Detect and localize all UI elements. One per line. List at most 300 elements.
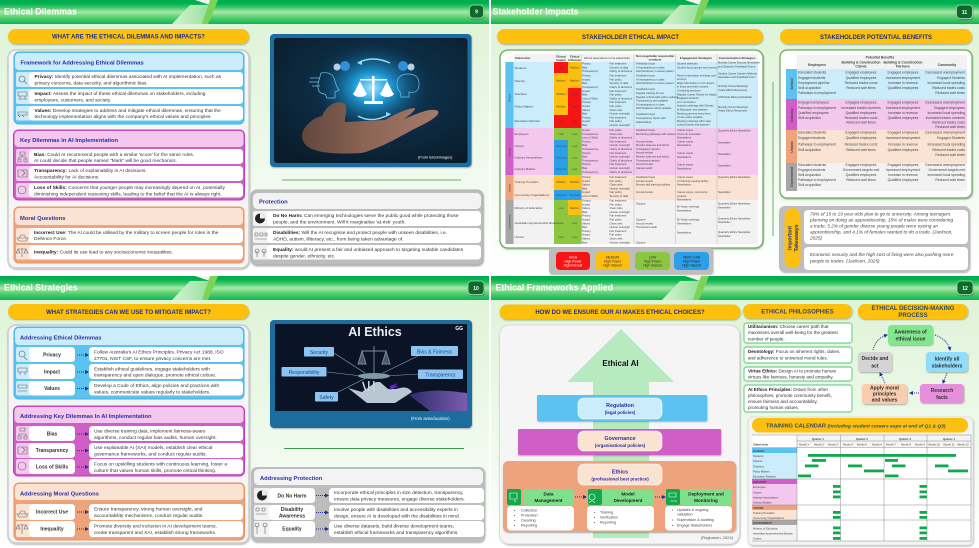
image: hand holding glowing scales — [270, 34, 472, 167]
impact and influence cells: Low — [572, 156, 577, 160]
column: model development: • — [594, 510, 596, 514]
calendar labels: Students — [753, 454, 764, 458]
card: AI ethics principles: ensure fairness and accountability, — [748, 399, 818, 404]
benefits column 2: Qualified employees — [846, 111, 877, 115]
ethical dependence column: Clarity of decisions — [610, 136, 633, 140]
impact and influence cells — [554, 62, 582, 244]
panel: ethical AI pyramid — [500, 325, 740, 544]
non-negotiable column: Monitor skill training facilities — [636, 183, 671, 187]
label: Ethical AI: Ethical AI — [602, 359, 639, 368]
non-negotiable column: Transparent reports — [636, 147, 660, 151]
legend: low — [635, 252, 670, 270]
panel: framework: Framework for Addressing Ethical Dilemmas — [20, 60, 144, 66]
panel: addressing protection: Involve people with disabilities and accessibility experts in — [334, 507, 458, 513]
stakeholder names: Community Organisations — [514, 193, 550, 197]
non-negotiable column: Annual review — [636, 139, 653, 143]
panel: addressing protection: design, ensure AI is developed with the disabilities in mind. — [334, 514, 460, 520]
panel: moral questions: Incorrect Use: The AI could be utilised by the military to screen people for roles in the — [34, 230, 219, 236]
heading pill: ethical philosophies — [743, 304, 852, 318]
ethical dependence column: Bias — [582, 155, 588, 159]
column: deployment and monitoring: Updates & ongoing — [677, 508, 708, 512]
node: apply principles: and values — [872, 398, 898, 404]
card: virtue ethics: Virtue Ethics: Design AI to promote human — [748, 368, 837, 374]
page number badge 9: 9 — [475, 10, 478, 16]
benefits headers: Potential Benefits — [866, 56, 894, 60]
impact and influence cells: High — [558, 66, 564, 70]
ethical dependence column: Fair policy — [610, 93, 622, 97]
panel: addressing ethical dilemmas: Establish ethical guidelines, engage stakeholders with — [94, 366, 210, 372]
benefits column 2: Reduced trades costs — [845, 81, 878, 85]
panel: addressing protection: Awareness — [279, 514, 305, 520]
benefits column 3: Qualified employees — [888, 116, 919, 120]
ethical dependence column: Privacy — [582, 229, 591, 233]
node: research facts: Research — [931, 388, 953, 394]
ethical dependence column: Fair treatment — [610, 139, 626, 143]
calendar labels: Quarter 3 — [899, 437, 911, 441]
slide: Ethical Strategies — [0, 276, 489, 548]
band: governance: Governance — [604, 436, 636, 442]
ethical dependence column: Fair policy — [610, 104, 622, 108]
communication column: Newsletter — [718, 152, 731, 156]
node: identify stakeholders: Identify all — [935, 356, 960, 362]
panel: addressing ethical dilemmas: Privacy — [43, 352, 61, 358]
tag: security: Security — [310, 350, 329, 356]
column: deployment and monitoring: Supervision & auditing — [677, 518, 714, 522]
stakeholder names: Policy Makers — [514, 104, 534, 108]
column: data management: • — [514, 514, 516, 518]
card: utilitarianism: Utilitarianism: Choose career path that — [748, 324, 829, 329]
panel: addressing key dilemmas: Use explainable AI (XAI) models, establish clear ethical — [94, 445, 212, 451]
communication column: Newsletter — [718, 164, 731, 168]
heading pill: WHAT ARE THE ETHICAL DILEMMAS AND IMPACTS? — [52, 34, 205, 40]
panel: addressing protection: Do No Harm — [278, 494, 307, 500]
divider — [282, 180, 461, 181]
ethical dependence column: Clear roles — [610, 236, 623, 240]
non-negotiable column: Feedback loops — [636, 87, 656, 91]
band: ethics: (professional best practice) — [591, 476, 649, 482]
communication column: Monthly Career Discuss Newsletter — [718, 60, 760, 64]
column: model development: Reporting — [600, 520, 616, 524]
calendar row name cells — [752, 448, 797, 540]
image: AI Ethics diagram — [270, 320, 472, 428]
ethical dependence column: Fair treatment — [610, 175, 626, 179]
panel: addressing ethical dilemmas: 27701, NIST CSF, to ensure privacy concerns are met. — [94, 356, 211, 362]
impact and influence cells: Low — [572, 144, 577, 148]
benefits column 3: Qualified employees — [888, 178, 919, 182]
node: decide and act: Decide and — [862, 356, 888, 362]
column: deployment and monitoring: • — [672, 518, 674, 522]
non-negotiable column: Monitor data use and ethics — [636, 143, 670, 147]
node: identify stakeholders: stakeholders — [932, 364, 963, 370]
benefits headers: Partners — [896, 64, 910, 68]
communication column: LMS Data Mining Newsletter — [718, 95, 752, 99]
source citation: (Roghanen, 2024) — [701, 535, 734, 540]
page number badge 12 — [957, 281, 973, 294]
ethical dependence column: Bias — [582, 225, 588, 229]
benefits headers: Building & Construction — [884, 60, 922, 64]
stakeholder names: Australian Apprenticeship Boards — [514, 221, 559, 225]
tag: safety: Safety — [319, 395, 334, 401]
benefits column 4: Government targets met — [928, 168, 965, 172]
engagement column: Meeting partners every term — [677, 111, 711, 115]
legend: high: High Power — [564, 260, 582, 264]
panel: important takeaways: Important — [788, 226, 794, 250]
impact and influence cells: Low — [572, 221, 577, 225]
column: model development: Verification — [600, 516, 618, 520]
node: identify stakeholders — [926, 352, 968, 372]
engagement column: Student webinars — [677, 62, 698, 66]
stakeholder names — [514, 66, 559, 239]
column: data management: Protection — [521, 514, 538, 518]
impact and influence cells: Medium — [556, 104, 566, 108]
non-negotiable column: Annual review — [636, 151, 653, 155]
band: regulation: Regulation — [606, 403, 634, 409]
heading pill: decision-making process: PROCESS — [898, 313, 928, 319]
panel: potential benefits table — [780, 50, 972, 198]
engagement column: Newsletters — [677, 143, 692, 147]
non-negotiable column: Feedback loops — [636, 175, 656, 179]
engagement column: Regular Career Panels for Highly — [677, 92, 717, 96]
card: utilitarianism: number of people. — [748, 336, 785, 342]
slide: Stakeholder Impacts — [491, 0, 979, 274]
column: deployment and monitoring — [665, 489, 732, 530]
calendar labels: Quarter 2 — [856, 437, 868, 441]
impact and influence cells: Medium — [570, 180, 579, 184]
node: apply principles — [862, 384, 907, 404]
non-negotiable column: Annual review — [636, 179, 653, 183]
calendar labels: Month 11 — [943, 442, 955, 446]
non-negotiable column: Transparent reports — [636, 158, 660, 162]
panel: important takeaways: apprenticeship, and 4.1% of females wanted to do a trade. (Jackson, — [810, 230, 953, 234]
impact and influence cells: Low — [559, 235, 564, 239]
benefits column 4: Reduced trades costs — [932, 148, 965, 152]
column: data management: Collection — [521, 508, 537, 512]
impact and influence cells: Very Low — [556, 144, 566, 148]
engagement column: Career expos — [677, 175, 694, 179]
column: model development — [587, 489, 654, 530]
calendar labels: Month 7 — [886, 442, 896, 446]
benefits column 4: Decreased unemployment — [925, 100, 965, 104]
benefits column 2: Engaged employees — [846, 163, 877, 167]
ethical dependence column: Bias — [582, 81, 588, 85]
non-negotiable column: Support — [636, 218, 646, 222]
communication column: Quarterly Ethics Newsletter — [718, 128, 751, 132]
benefits column 1: Skill acquisition — [798, 116, 821, 120]
panel: addressing protection: ensure data privacy measures, engage diverse stakeholders. — [334, 496, 465, 502]
panel: training calendar: TRAINING CALENDAR (including student careers expo at end of Q1 & Q3) — [766, 424, 946, 430]
stakeholder names: Training Providers — [514, 180, 539, 184]
calendar labels: Quarter 1 — [812, 437, 824, 441]
ethical dependence column: Impact — [582, 233, 590, 237]
page number badge 12: 12 — [962, 286, 968, 292]
engagement column: Major information on AI careers — [677, 81, 715, 85]
calendar labels: Month 9 — [915, 442, 925, 446]
column: data management — [507, 489, 574, 530]
panel: addressing ethical dilemmas: Follow Australia's AI Ethics Principles, Privacy Act 1988, ISO — [94, 350, 224, 356]
benefits column 4: Reduced trades costs — [932, 120, 965, 124]
legend: very low: High Power — [683, 260, 701, 264]
panel: addressing ethical dilemmas: Addressing Ethical Dilemmas — [20, 336, 102, 342]
panel: addressing key dilemmas: Loss of Skills — [36, 464, 68, 470]
ethical dependence column: Human oversight — [610, 123, 630, 127]
non-negotiable column: Annual review — [636, 190, 653, 194]
card: utilitarianism — [744, 323, 852, 343]
benefits column 2: Engaged employees — [846, 70, 877, 74]
table column headers: Ethical — [556, 54, 566, 58]
calendar labels — [753, 437, 969, 540]
benefits column 2: Government targets met — [843, 168, 879, 172]
card: deontology — [744, 347, 852, 363]
panel: moral questions: Moral Questions — [20, 216, 65, 222]
column: data management: • — [514, 518, 516, 522]
card: deontology: Deontology: Focus on inherent rights, duties, — [748, 349, 840, 354]
communication column: and Quarterly Feedback Forms — [718, 64, 756, 68]
benefits headers: Building & Construction — [842, 60, 880, 64]
heading pill — [497, 29, 763, 44]
panel: framework: privacy concerns, data security, and algorithmic bias. — [34, 80, 148, 86]
calendar labels: Education Partners — [753, 474, 777, 478]
calendar labels: Ministry of Education — [753, 526, 778, 530]
impact and influence cells: Medium — [556, 92, 566, 96]
non-negotiable column: Annual review — [636, 162, 653, 166]
ethical dependence column: Loss of Skills — [582, 96, 598, 100]
panel: potential benefits table: Industry — [790, 108, 794, 122]
arrows: process cycle — [873, 335, 950, 393]
column: model development: • — [594, 520, 596, 524]
ethical dependence column: Clarity of decisions — [610, 96, 633, 100]
engagement column: Newsletters — [677, 136, 692, 140]
panel: addressing key dilemmas: Addressing Key Dilemmas In AI Implementation — [20, 414, 152, 420]
benefits column 2: Reduced wait times — [846, 178, 876, 182]
engagement column: Newsletters — [677, 221, 692, 225]
engagement column: AI Training meeting facility — [677, 179, 709, 183]
ethical dependence column: Human oversight — [610, 143, 630, 147]
calendar labels: Quarter 4 — [943, 437, 955, 441]
benefits column 1: Skill acquisition — [798, 173, 821, 177]
engagement column: Newsletters — [677, 230, 692, 234]
ethical dependence column: Clarity of decisions — [610, 85, 633, 89]
benefits column 1: Engaged students — [798, 168, 826, 172]
ethical dependence column: Values — [582, 108, 591, 112]
ethical dependence column: Human oversight — [610, 166, 630, 170]
non-negotiable column: Support — [636, 241, 646, 245]
ethical dependence column: Impact — [582, 119, 590, 123]
legend: low: High Power — [644, 260, 662, 264]
engagement column: Career expos — [677, 162, 694, 166]
card: virtue ethics — [744, 367, 852, 381]
engagement column: Industry meetings with Ministry — [677, 104, 714, 108]
benefits column 4: Engaged Students — [937, 76, 965, 80]
slide: Ethical Frameworks Applied — [491, 276, 979, 548]
column: model development: Development — [614, 498, 643, 503]
impact and influence cells: Very Low — [556, 167, 566, 171]
slide header band — [491, 0, 979, 24]
legend: very low: High Interest — [682, 264, 701, 268]
card: deontology: and adherence to universal moral rules. — [748, 356, 828, 360]
calendar labels: Month 5 — [857, 442, 867, 446]
engagement column: Newsletters — [677, 183, 692, 187]
calendar labels: Unions — [753, 490, 762, 494]
ethical dependence column: Fair policy — [610, 218, 622, 222]
card: AI ethics principles: AI Ethics Principles: Draws from other — [748, 387, 829, 392]
node: apply principles: principles — [873, 392, 897, 398]
stakeholder names: Employers — [514, 132, 529, 136]
panel: protection: Do No Harm: Can emerging technologies serve the public good while protecting those — [273, 213, 459, 219]
panel: addressing key dilemmas: Bias — [47, 432, 57, 438]
communication column: Quarterly Ethics Newsletter — [718, 216, 751, 220]
page number badge 10: 10 — [473, 286, 479, 292]
ethical dependence column: Bias — [582, 240, 588, 244]
benefits column 1: Pathways to employment — [798, 91, 836, 95]
engagement column: Newsletters — [677, 198, 692, 202]
ethical dependence column: Transparency — [582, 170, 599, 174]
ethical dependence column: Values — [582, 236, 591, 240]
column: data management: • — [514, 508, 516, 512]
benefits column 1: Skill acquisition — [798, 183, 821, 187]
panel: protection: Protection — [259, 200, 288, 206]
table column headers: conducts — [649, 58, 662, 62]
benefits column 2: Reduced trades costs — [845, 116, 878, 120]
benefits column 4: Decreased unemployment — [925, 163, 965, 167]
table column headers: Communication Strategies — [719, 56, 756, 60]
ethical dependence column: Impact — [582, 77, 590, 81]
stakeholder names: Ministry of Education — [514, 206, 543, 210]
calendar labels: Month 10 — [928, 442, 940, 446]
node: decide and act: act — [871, 364, 879, 370]
legend: high: High Interest — [564, 264, 582, 268]
tag: bias and fairness — [411, 346, 458, 356]
panel: important takeaways: 2025) — [809, 236, 822, 240]
ethical dependence column: Security of data — [610, 194, 629, 198]
ethical dependence column: Bias — [582, 123, 588, 127]
benefits column 4: Reduced trades costs — [932, 86, 965, 90]
panel: protection: people, and the environment. Will it marginalise 'at-risk' youth. — [273, 220, 406, 226]
table column headers: Ethical dependence to the stakeholder — [584, 56, 630, 60]
impact and influence cells: High — [558, 120, 564, 124]
diagram: decision-making cycle — [858, 325, 968, 404]
page number badge 10 — [468, 281, 484, 294]
panel: moral questions: Inequality: Could its use lead to any socioeconomic inequalities. — [34, 250, 173, 256]
communication column: Newsletter — [718, 140, 731, 144]
ethical dependence column: Clear roles — [610, 108, 623, 112]
ethical dependence column: Bias — [582, 186, 588, 190]
calendar labels: Training Providers — [753, 511, 775, 515]
tag: security — [304, 347, 334, 356]
impact and influence cells: Medium — [556, 78, 566, 82]
panel: addressing moral questions: Ensure transparency, strong human oversight, and — [94, 506, 203, 512]
legend: medium — [595, 252, 630, 270]
heading pill: decision-making process — [858, 304, 968, 319]
ethical dependence column: Human oversight — [610, 210, 630, 214]
panel: key dilemmas: Loss of Skills: Concerns that younger people may increasingly depend on AI, potentially — [34, 185, 225, 191]
communication column: Monthly School Meetings — [718, 84, 749, 88]
calendar labels: Industry Bodies — [753, 500, 772, 504]
calendar labels: INDUSTRY — [753, 480, 767, 484]
benefits column 4: Reduced wait times — [935, 153, 965, 157]
node: awareness — [888, 325, 933, 345]
panel: training calendar — [748, 417, 973, 545]
ethical dependence column: Fair treatment — [610, 162, 626, 166]
ethical dependence column — [582, 62, 633, 244]
benefits column 4: Reduced wait times — [935, 91, 965, 95]
ethical dependence column: Clarity of decisions — [610, 158, 633, 162]
calendar labels: Parents — [753, 459, 763, 463]
panel: addressing protection — [251, 467, 485, 542]
non-negotiable column: Feedback loops — [636, 112, 656, 116]
ethical dependence column: Privacy — [582, 74, 591, 78]
calendar labels: Month 3 — [828, 442, 838, 446]
ethical dependence column: Human oversight — [610, 186, 630, 190]
heading pill: STAKEHOLDER ETHICAL IMPACT — [582, 35, 679, 41]
column: data management: • — [514, 524, 516, 528]
panel: protection: Disabilities: Will the AI recognise and protect people with unseen disabilities, i.e. — [273, 230, 447, 236]
panel: addressing moral questions — [14, 483, 244, 540]
ethical dependence column: Human oversight — [610, 112, 630, 116]
benefits column 3: Increase in revenue — [888, 173, 918, 177]
ethical dependence column: Human oversight — [610, 240, 630, 244]
panel: framework: technology implementation aligns with the company's ethical values and principles. — [34, 114, 212, 120]
ethical dependence column: Clarity of decisions — [610, 147, 633, 151]
benefits column 4: Increased local spending — [927, 81, 965, 85]
panel: addressing ethical dilemmas: Develop a Code of Ethics, align policies and practices with — [94, 383, 220, 389]
slide header band — [491, 276, 979, 300]
non-negotiable column: AI transparency in class — [636, 65, 665, 69]
non-negotiable column: Add disclaimer about updates — [636, 106, 672, 110]
node: research facts: facts — [936, 395, 948, 401]
panel: addressing ethical dilemmas: Impact — [44, 370, 60, 376]
panel: key dilemmas — [14, 130, 244, 200]
node: awareness: ethical issue — [895, 336, 926, 342]
communication column: Quarterly Ethics Newsletter — [718, 230, 751, 234]
calendar labels: Employers — [753, 485, 766, 489]
heading pill: decision-making process: ETHICAL DECISION-MAKING — [872, 306, 955, 312]
panel: addressing key dilemmas: algorithms, conduct regular bias audits, human oversight. — [94, 435, 217, 441]
panel: important takeaways: planning on doing an apprenticeship, 15% of males were considering — [809, 218, 953, 222]
panel: philosophies — [744, 323, 852, 412]
ethical dependence column: Impact — [582, 218, 590, 222]
non-negotiable column: Annual review — [636, 221, 653, 225]
engagement column: Newsletters — [677, 166, 692, 170]
impact and influence cells: Low — [572, 167, 577, 171]
non-negotiable column: Regular training for use — [636, 91, 664, 95]
benefits column 1: Qualified employees — [798, 111, 829, 115]
benefits headers: Clients — [855, 64, 867, 68]
benefits column 3: Increased employment — [886, 168, 920, 172]
benefits column 1: Educated students — [798, 163, 826, 167]
non-negotiable column: Support — [636, 202, 646, 206]
benefits column 1: Engaged employees — [798, 100, 829, 104]
panel: addressing key dilemmas: Transparency — [36, 448, 68, 454]
ethical dependence column: Impact — [582, 89, 590, 93]
ethical dependence column: Clear roles — [610, 183, 623, 187]
legend: low: LOW — [649, 256, 657, 260]
column: deployment and monitoring: • — [672, 524, 674, 528]
calendar grid lines — [752, 435, 971, 541]
benefits headers — [808, 56, 956, 68]
panel: addressing moral questions: Inequality — [40, 526, 64, 532]
ethical dependence column: Fair treatment — [610, 229, 626, 233]
ethical dependence column: Bias — [582, 112, 588, 116]
stakeholder names: Parents — [514, 79, 525, 83]
table column headers: Influence — [568, 58, 581, 62]
panel: framework — [14, 52, 244, 124]
benefits column 4: Engaged Students — [937, 136, 965, 140]
panel: dilemmas container — [8, 50, 249, 268]
tag: transparency: Transparency — [425, 372, 456, 378]
ethical dependence column: Privacy — [582, 151, 591, 155]
communication column: Yearly Ethics Resources — [718, 109, 748, 113]
slide header band — [0, 0, 489, 24]
